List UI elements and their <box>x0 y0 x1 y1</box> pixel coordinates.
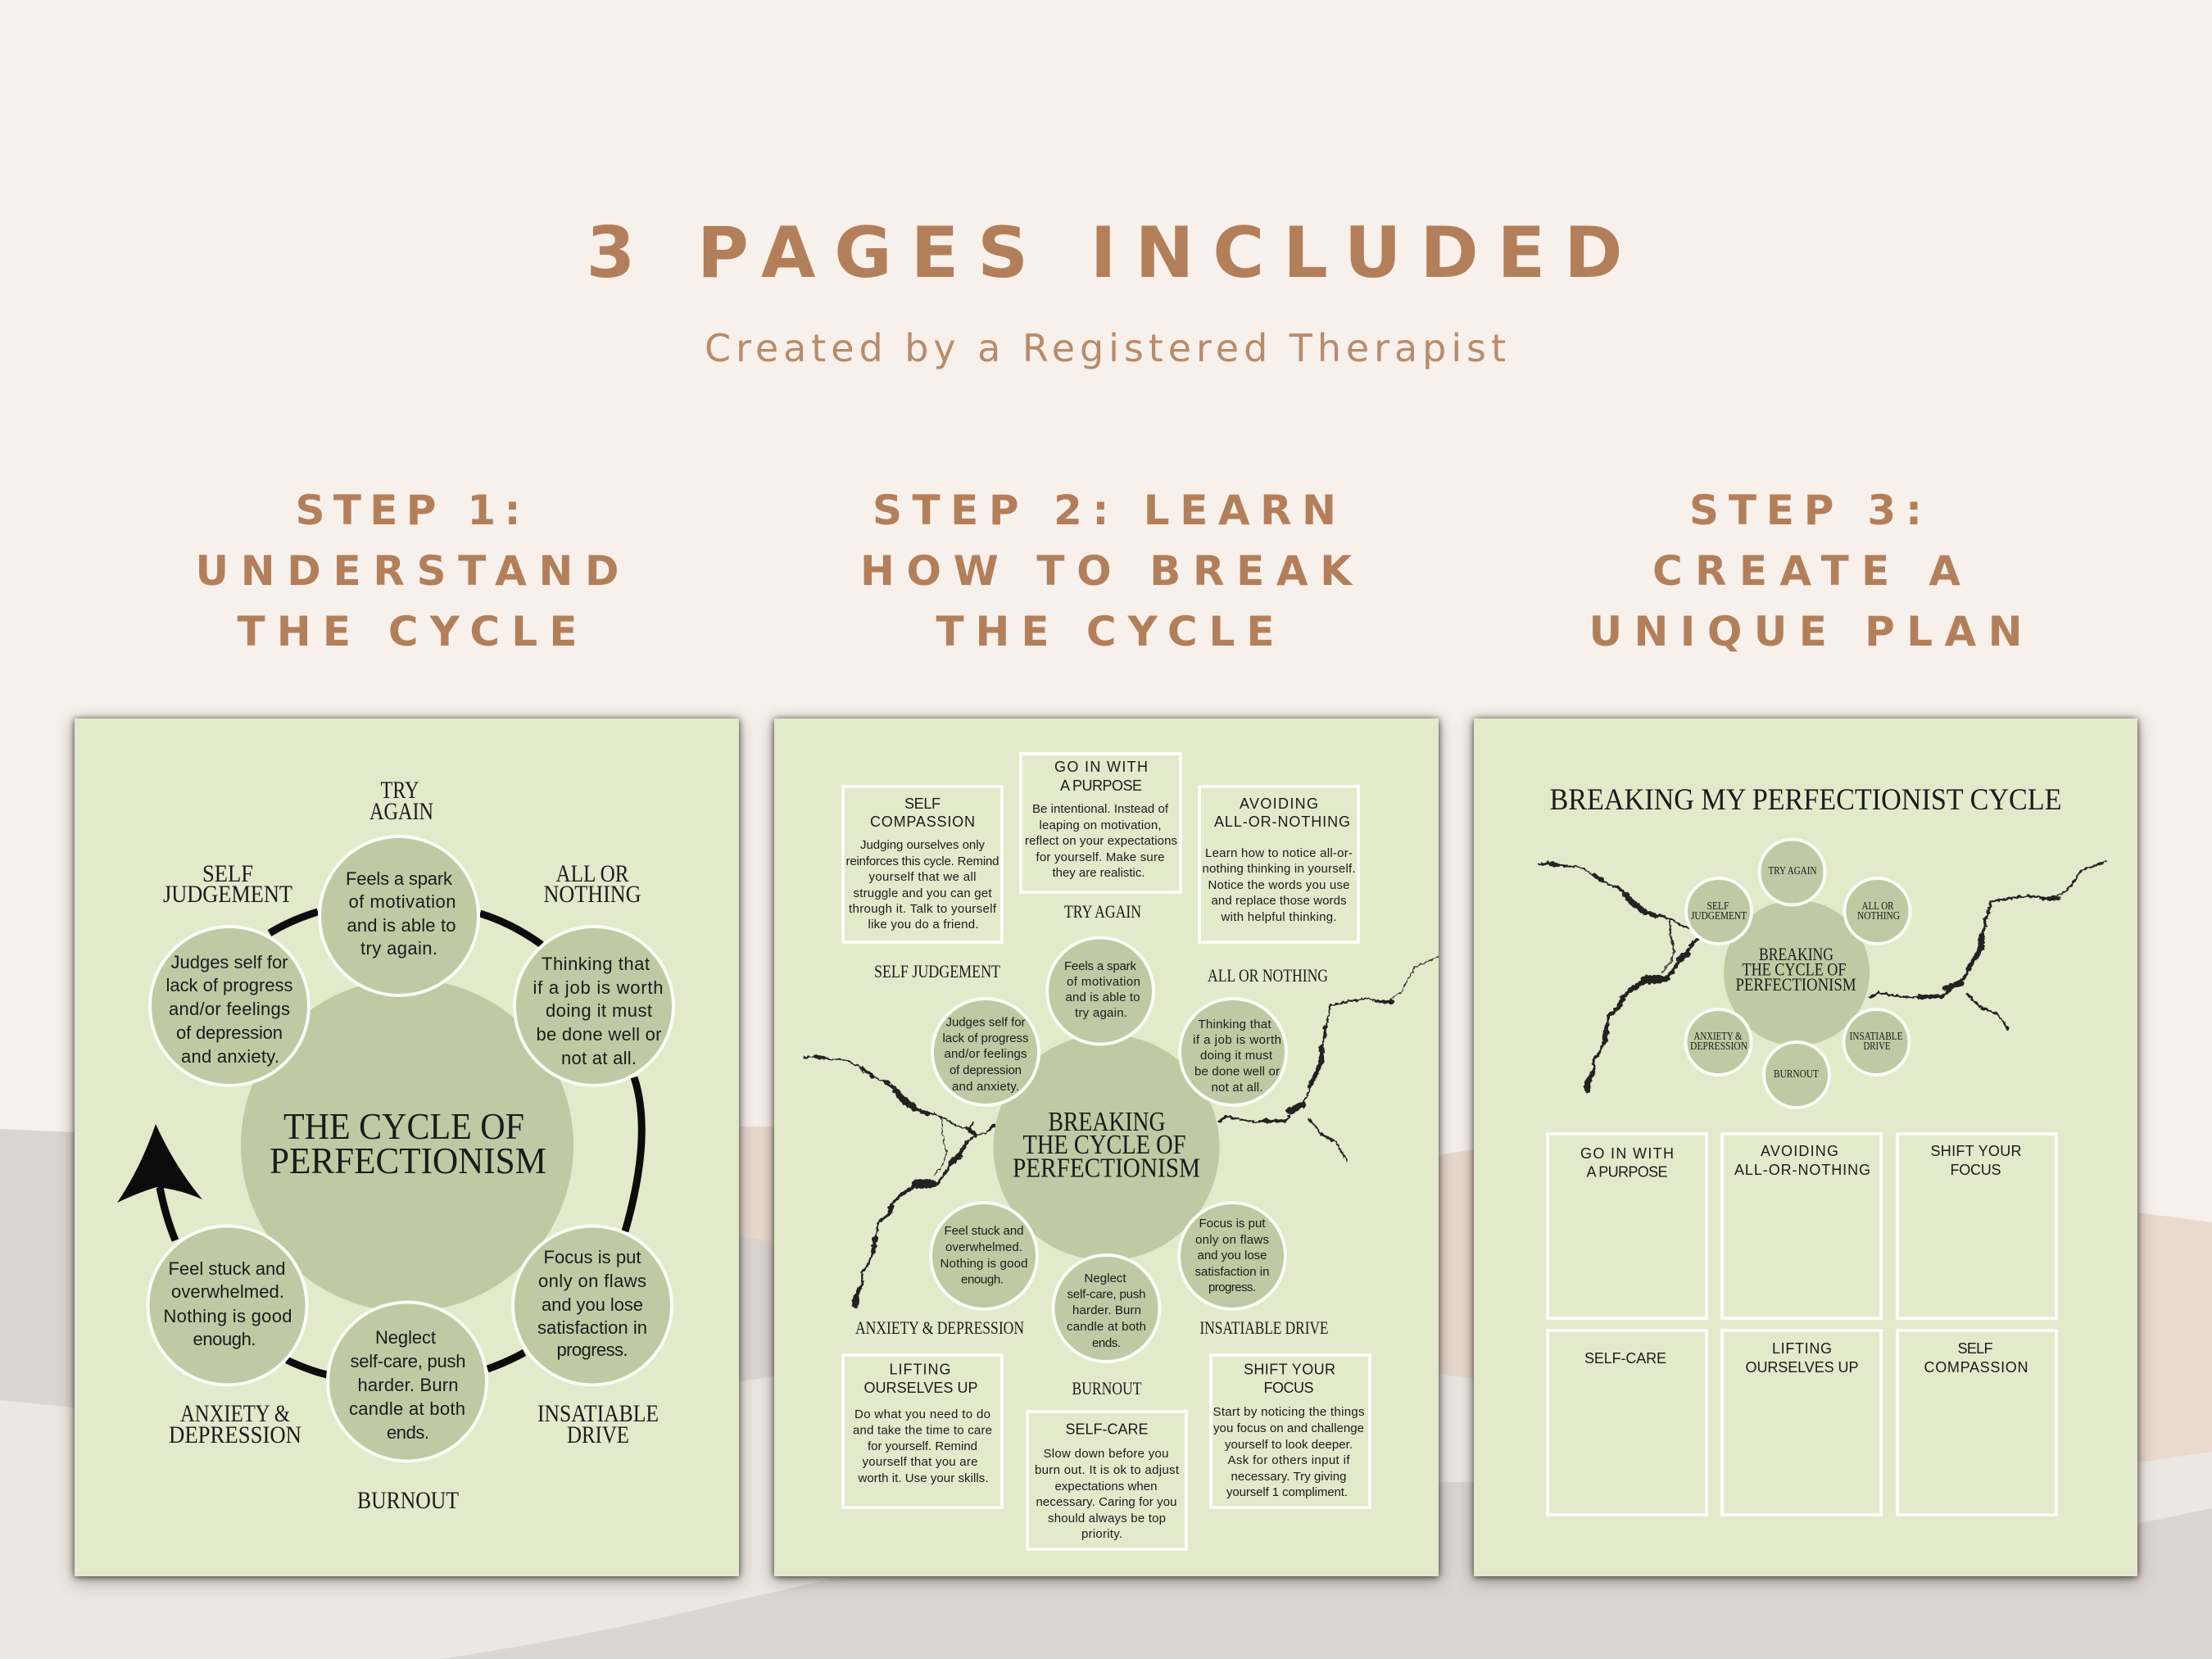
label: all or nothing: NOTHING <box>544 881 641 908</box>
label: burnout: BURNOUT <box>357 1487 459 1514</box>
box: lifting ourselves up: for yourself. Remind <box>868 1439 977 1453</box>
circle: all or nothing: ALL OR <box>1861 900 1894 913</box>
panel: the cycle of perfectionism <box>75 718 739 1576</box>
circle: all or nothing <box>514 927 673 1086</box>
box: shift your focus: FOCUS <box>1263 1380 1314 1396</box>
label: anxiety and depression: DEPRESSION <box>169 1421 301 1448</box>
box: go in with a purpose: GO IN WITH <box>1054 759 1148 775</box>
circle: self judgement: and/or feelings <box>169 999 290 1019</box>
circle: burnout: Neglect <box>1085 1271 1126 1285</box>
box: self compassion: COMPASSION <box>870 814 975 830</box>
circle: all or nothing: doing it must <box>546 1000 652 1021</box>
circle: all or nothing: if a job is worth <box>1193 1033 1281 1047</box>
circle: try again <box>1760 839 1825 904</box>
box: self-care: necessary. Caring for you <box>1036 1495 1176 1509</box>
circle: burnout: harder. Burn <box>357 1375 459 1395</box>
box: avoiding all-or-nothing: Notice the words you use <box>1208 878 1350 892</box>
circle: self judgement: and/or feelings <box>944 1047 1027 1061</box>
box: self-care: should always be top <box>1048 1512 1166 1525</box>
box: self compassion: through it. Talk to yourself <box>849 902 997 916</box>
circle: insatiable drive: satisfaction in <box>537 1317 647 1338</box>
circle: insatiable drive: satisfaction in <box>1194 1265 1270 1279</box>
centre circle: breaking the cycle: BREAKING <box>1759 944 1834 964</box>
circle: try again: of motivation <box>1067 975 1140 989</box>
centre circle: breaking the cycle: PERFECTIONISM <box>1013 1154 1200 1183</box>
circle: insatiable drive: INSATIABLE <box>1850 1031 1902 1043</box>
circle: burnout <box>1054 1255 1160 1362</box>
box: self compassion: COMPASSION <box>1924 1359 2028 1376</box>
box: avoiding all-or-nothing: nothing thinking in yourself. <box>1203 862 1355 876</box>
box: lifting ourselves up <box>843 1355 1002 1507</box>
box: go in with a purpose: GO IN WITH <box>1580 1145 1674 1162</box>
box: lifting ourselves up: LIFTING <box>1772 1340 1832 1357</box>
circle: try again: and is able to <box>1065 990 1140 1004</box>
main title: 3 PAGES INCLUDED <box>587 212 1622 294</box>
circle: burnout: candle at both <box>349 1398 465 1419</box>
worksheet title: BREAKING MY PERFECTIONIST CYCLE <box>1550 783 2061 817</box>
circle: all or nothing: if a job is worth <box>533 977 664 998</box>
box: shift your focus: yourself to look deeper. <box>1225 1438 1353 1452</box>
box: avoiding all-or-nothing <box>1722 1134 1881 1318</box>
box: go in with a purpose <box>1548 1134 1707 1318</box>
box: self-care: priority. <box>1081 1527 1122 1541</box>
box: self compassion: like you do a friend. <box>868 918 978 931</box>
circle: insatiable drive: Focus is put <box>1199 1217 1266 1231</box>
box: self-care: SELF-CARE <box>1065 1421 1149 1437</box>
box: lifting ourselves up: worth it. Use your skills. <box>857 1471 988 1485</box>
circle: burnout: ends. <box>1092 1336 1121 1350</box>
box: self-care <box>1548 1330 1707 1515</box>
label: try again: TRY <box>380 777 419 804</box>
box: self compassion: reinforces this cycle. Remind <box>845 854 999 868</box>
circle: try again: Feels a spark <box>346 868 453 889</box>
subtitle: Created by a Registered Therapist <box>705 326 1506 370</box>
circle: burnout: ends. <box>387 1422 429 1443</box>
circle: all or nothing <box>1845 878 1911 944</box>
heading: step 2: HOW TO BREAK <box>860 547 1353 595</box>
box: go in with a purpose: leaping on motivation, <box>1039 818 1162 832</box>
circle: burnout: candle at both <box>1067 1320 1146 1334</box>
circle: self judgement <box>932 999 1039 1105</box>
box: avoiding all-or-nothing: and replace those words <box>1211 894 1347 908</box>
circle: self judgement: JUDGEMENT <box>1691 910 1747 922</box>
circle: self judgement: Judges self for <box>945 1016 1026 1029</box>
centre circle: breaking the cycle: THE CYCLE OF <box>1022 1130 1186 1160</box>
circle: try again: try again. <box>1075 1006 1127 1020</box>
circle: try again: of motivation <box>349 891 456 912</box>
circle: insatiable drive <box>1843 1009 1909 1075</box>
box: self compassion <box>843 786 1002 942</box>
box: go in with a purpose: Be intentional. Instead of <box>1032 802 1169 816</box>
label: insatiable drive: DRIVE <box>567 1421 629 1448</box>
cycle ring arcs <box>270 912 641 1375</box>
box: avoiding all-or-nothing: Learn how to notice all-or- <box>1205 846 1353 860</box>
heading: step 1: THE CYCLE <box>238 608 577 655</box>
circle: insatiable drive: only on flaws <box>1195 1233 1269 1247</box>
label: try again: AGAIN <box>369 798 433 825</box>
label: all or nothing: ALL OR <box>555 860 629 887</box>
circle: anxiety and depression: overwhelmed. <box>945 1240 1022 1254</box>
centre circle: the cycle of perfectionism <box>241 979 573 1312</box>
label: insatiable drive <box>537 1400 659 1448</box>
box: self compassion: struggle and you can get <box>854 886 992 900</box>
box: go in with a purpose: A PURPOSE <box>1060 777 1142 794</box>
centre circle: breaking the cycle: BREAKING <box>1049 1107 1165 1137</box>
circle: self judgement: of depression <box>176 1022 283 1043</box>
label: self judgement: JUDGEMENT <box>163 881 292 908</box>
circle: anxiety and depression: Nothing is good <box>941 1257 1027 1271</box>
heading: step 3 <box>1589 487 2022 655</box>
circle: self judgement: lack of progress <box>942 1031 1029 1045</box>
panel: breaking my perfectionist cycle worksheet <box>1474 718 2137 1576</box>
circle: anxiety and depression: enough. <box>193 1329 256 1349</box>
heading: step 3: CREATE A <box>1652 547 1960 595</box>
box: lifting ourselves up: OURSELVES UP <box>1745 1359 1858 1376</box>
circle: all or nothing: NOTHING <box>1857 910 1900 922</box>
circle: self judgement: and anxiety. <box>952 1080 1019 1094</box>
box: shift your focus <box>1897 1134 2056 1318</box>
circle: burnout: self-care, push <box>1067 1288 1145 1301</box>
box: self compassion: SELF <box>904 796 941 812</box>
crack: right <box>1870 861 2106 1030</box>
heading: step 2: THE CYCLE <box>936 608 1275 655</box>
box: lifting ourselves up: LIFTING <box>890 1362 950 1378</box>
circle: insatiable drive: only on flaws <box>538 1271 646 1291</box>
box: lifting ourselves up <box>1722 1330 1881 1515</box>
box: avoiding all-or-nothing: AVOIDING <box>1761 1143 1838 1159</box>
circle: all or nothing: not at all. <box>1211 1081 1263 1095</box>
circle: burnout: Neglect <box>375 1327 436 1348</box>
circle: anxiety and depression <box>931 1203 1037 1309</box>
circle: anxiety and depression: Feel stuck and <box>944 1224 1024 1238</box>
circle: anxiety and depression: overwhelmed. <box>171 1281 284 1302</box>
label: try again: TRY AGAIN <box>1064 901 1141 922</box>
centre circle: breaking the cycle: THE CYCLE OF <box>1742 959 1847 980</box>
heading: step 1: STEP 1: <box>295 487 521 534</box>
heading: step 1: UNDERSTAND <box>195 547 619 595</box>
circle: anxiety and depression <box>147 1226 306 1385</box>
circle: insatiable drive <box>1179 1203 1285 1309</box>
label: anxiety and depression: ANXIETY & DEPRESSION <box>855 1317 1024 1338</box>
circle: self judgement <box>150 927 309 1086</box>
box: go in with a purpose: reflect on your expectations <box>1025 834 1177 848</box>
heading: step 2: STEP 2: LEARN <box>873 487 1336 534</box>
crack: right <box>1218 957 1438 1161</box>
circle: insatiable drive: Focus is put <box>544 1247 641 1267</box>
box: shift your focus: yourself 1 compliment. <box>1226 1485 1348 1499</box>
box: self-care <box>1027 1412 1186 1549</box>
crack: left <box>1538 863 1720 1090</box>
centre circle: the cycle of perfectionism: PERFECTIONISM <box>270 1140 546 1181</box>
circle: burnout: BURNOUT <box>1774 1068 1819 1081</box>
box: avoiding all-or-nothing: ALL-OR-NOTHING <box>1214 814 1350 830</box>
label: insatiable drive: INSATIABLE DRIVE <box>1199 1317 1329 1338</box>
circle: burnout <box>1764 1042 1829 1108</box>
circle: try again <box>1047 937 1154 1044</box>
circle: try again: TRY AGAIN <box>1768 865 1817 877</box>
circle: anxiety and depression: enough. <box>961 1273 1004 1286</box>
circle: self judgement: SELF <box>1707 900 1729 913</box>
box: self compassion: Judging ourselves only <box>860 838 985 852</box>
circle: insatiable drive <box>513 1226 672 1385</box>
label: all or nothing: ALL OR NOTHING <box>1208 965 1328 986</box>
label: burnout: BURNOUT <box>1072 1378 1142 1398</box>
circle: try again: Feels a spark <box>1064 959 1137 973</box>
circle: burnout: harder. Burn <box>1072 1303 1141 1317</box>
box: lifting ourselves up: Do what you need to do <box>854 1407 990 1421</box>
circle: insatiable drive: progress. <box>557 1339 628 1360</box>
heading: step 2 <box>860 487 1353 655</box>
box: avoiding all-or-nothing: with helpful thinking. <box>1221 910 1337 924</box>
box: shift your focus: you focus on and challenge <box>1213 1421 1364 1435</box>
box: lifting ourselves up: yourself that you are <box>862 1455 978 1469</box>
circle: anxiety and depression <box>1686 1009 1752 1075</box>
circle: all or nothing: be done well or <box>536 1024 662 1045</box>
box: go in with a purpose: A PURPOSE <box>1586 1163 1668 1180</box>
box: avoiding all-or-nothing: AVOIDING <box>1240 796 1318 812</box>
label: all or nothing <box>544 860 641 908</box>
circle: anxiety and depression: ANXIETY & <box>1694 1031 1743 1043</box>
label: self judgement: SELF JUDGEMENT <box>874 961 1000 981</box>
box: self-care: Slow down before you <box>1044 1447 1168 1461</box>
label: self judgement: SELF <box>202 860 253 887</box>
crack: left <box>805 1056 994 1305</box>
box: shift your focus <box>1211 1355 1370 1507</box>
circle: burnout <box>328 1303 487 1462</box>
centre circle: breaking the cycle <box>993 1034 1219 1260</box>
circle: self judgement: lack of progress <box>165 975 293 995</box>
label: self judgement <box>163 860 292 908</box>
box: shift your focus: Ask for others input if <box>1227 1453 1350 1467</box>
heading: step 1 <box>195 487 619 655</box>
circle: self judgement <box>1686 878 1752 944</box>
label: anxiety and depression: ANXIETY & <box>180 1400 290 1427</box>
circle: insatiable drive: and you lose <box>542 1294 643 1315</box>
label: anxiety and depression <box>169 1400 301 1448</box>
circle: anxiety and depression: Feel stuck and <box>169 1258 285 1279</box>
circle: try again: and is able to <box>347 915 456 936</box>
circle: anxiety and depression: DEPRESSION <box>1690 1040 1747 1053</box>
circle: all or nothing: Thinking that <box>542 954 650 974</box>
heading: step 3: STEP 3: <box>1689 487 1922 534</box>
box: self compassion: SELF <box>1958 1340 1992 1357</box>
label: insatiable drive: INSATIABLE <box>537 1400 659 1427</box>
box: go in with a purpose: for yourself. Make sure <box>1036 850 1165 864</box>
box: shift your focus: SHIFT YOUR <box>1930 1143 2022 1159</box>
centre circle: breaking the cycle <box>1724 900 1870 1045</box>
box: lifting ourselves up: and take the time to care <box>853 1424 992 1437</box>
heading: step 3: UNIQUE PLAN <box>1589 608 2022 655</box>
circle: insatiable drive: DRIVE <box>1863 1040 1891 1053</box>
box: self-care: SELF-CARE <box>1584 1350 1666 1367</box>
circle: try again: try again. <box>360 938 437 959</box>
circle: burnout: self-care, push <box>351 1351 465 1371</box>
circle: self judgement: Judges self for <box>170 952 288 972</box>
box: self compassion <box>1897 1330 2056 1515</box>
box: shift your focus: necessary. Try giving <box>1231 1470 1347 1484</box>
circle: all or nothing <box>1180 999 1286 1105</box>
circle: self judgement: and anxiety. <box>181 1046 279 1067</box>
box: go in with a purpose <box>1021 754 1181 892</box>
circle: all or nothing: doing it must <box>1200 1049 1273 1063</box>
centre circle: breaking the cycle: PERFECTIONISM <box>1735 974 1856 995</box>
box: avoiding all-or-nothing: ALL-OR-NOTHING <box>1734 1162 1870 1178</box>
box: shift your focus: FOCUS <box>1950 1162 2001 1178</box>
circle: insatiable drive: and you lose <box>1198 1249 1267 1262</box>
box: avoiding all-or-nothing <box>1199 786 1358 942</box>
circle: anxiety and depression: Nothing is good <box>164 1306 292 1326</box>
label: try again <box>369 777 433 825</box>
panel: breaking the cycle of perfectionism <box>774 718 1439 1576</box>
box: self-care: burn out. It is ok to adjust <box>1035 1463 1180 1477</box>
box: self-care: expectations when <box>1055 1480 1157 1494</box>
circle: insatiable drive: progress. <box>1208 1281 1256 1294</box>
circle: try again <box>320 836 478 995</box>
box: go in with a purpose: they are realistic. <box>1052 866 1145 880</box>
circle: all or nothing: Thinking that <box>1198 1018 1271 1031</box>
circle: all or nothing: not at all. <box>561 1048 637 1068</box>
box: self compassion: yourself that we all <box>868 870 977 884</box>
box: shift your focus: Start by noticing the things <box>1213 1405 1365 1419</box>
arrow <box>117 1124 202 1240</box>
centre circle: the cycle of perfectionism: THE CYCLE OF <box>283 1105 524 1147</box>
circle: all or nothing: be done well or <box>1194 1065 1280 1078</box>
box: shift your focus: SHIFT YOUR <box>1244 1362 1335 1378</box>
circle: self judgement: of depression <box>950 1063 1022 1077</box>
box: lifting ourselves up: OURSELVES UP <box>863 1380 978 1396</box>
